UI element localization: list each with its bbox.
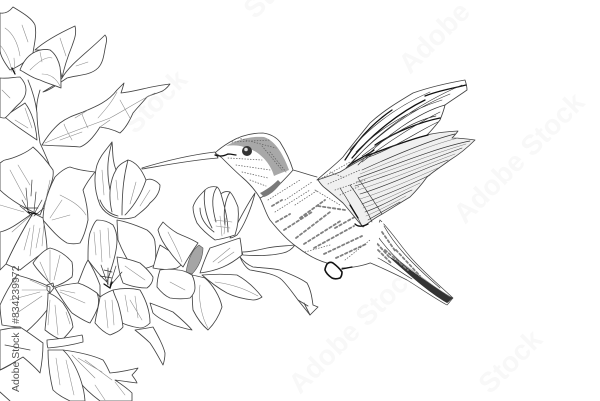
lower left petal: [0, 77, 26, 118]
right back petal: [117, 257, 153, 288]
center petal: [20, 49, 61, 88]
left petals: [0, 275, 50, 333]
right petal: [43, 167, 95, 244]
bottom petal: [45, 293, 73, 340]
back petals: [63, 350, 138, 401]
body fill: [260, 170, 384, 268]
watermark: repeated stock text: Adobe Stock: [447, 86, 591, 229]
watermark: repeated stock text: [117, 0, 591, 399]
upper petal: [0, 7, 36, 70]
eye: [242, 146, 252, 156]
far leaf: [43, 35, 107, 92]
hummingbird: [142, 80, 475, 305]
collar: [47, 335, 83, 348]
left fragments: [0, 327, 43, 373]
body shading: [272, 200, 366, 258]
stamen cone: [186, 245, 203, 274]
upper petal: [88, 220, 117, 282]
flower: bottom: [0, 327, 138, 401]
watermark: repeated stock text: Adobe Stock: [282, 256, 426, 399]
left lower petal: [157, 269, 195, 299]
right lower petal: [202, 274, 262, 300]
back leaf: [230, 193, 255, 238]
bud: center top: [95, 142, 160, 219]
stem: [28, 80, 50, 167]
foot: [325, 262, 342, 279]
left upper petal: [153, 245, 185, 270]
body outline: belly and back: [260, 170, 370, 268]
wing covert shading: [322, 162, 365, 195]
tail: [368, 220, 453, 305]
stamens: [100, 265, 122, 286]
wing upper feathers: [317, 80, 467, 180]
lower right petal: [113, 288, 150, 328]
leaf: [135, 327, 165, 365]
stamens: [20, 180, 44, 216]
right petal: [55, 283, 99, 323]
detail lines: [0, 25, 88, 128]
small left leaf: [5, 103, 37, 140]
lower leaf: [150, 303, 192, 330]
top petal: [0, 147, 53, 215]
flower: magnolia right: [150, 187, 318, 330]
watermark: repeated stock text: Stock: [117, 63, 193, 139]
bud: [193, 187, 238, 240]
big leaf: [42, 83, 170, 147]
lower petal: [95, 290, 123, 335]
primary feather lines: [345, 85, 466, 166]
left lobe: [78, 260, 100, 297]
tendril upper: [242, 245, 295, 256]
flower: lower left: [0, 248, 99, 340]
watermark: repeated stock text: Stock: [472, 323, 548, 399]
beak: [142, 152, 218, 169]
flower group: top left with leaves: [0, 7, 170, 167]
front petal: [48, 350, 85, 401]
tendril lower with bud: [240, 257, 318, 315]
flower: middle: [78, 220, 165, 365]
flower: behind middle: [117, 220, 156, 270]
head: [215, 133, 293, 198]
lower petals: [6, 213, 47, 270]
flower: large left: [0, 147, 95, 270]
stock id label: Adobe Stock | #834239972: [10, 265, 22, 392]
bottom petal: [192, 275, 222, 330]
head shading: [226, 137, 289, 176]
right up petal: [200, 238, 242, 273]
right petal: [35, 26, 76, 78]
secondary feather lines: [340, 134, 470, 226]
top petal: [33, 248, 73, 287]
tail dark wedge: [388, 256, 453, 303]
wing lower feathers: [318, 131, 475, 227]
